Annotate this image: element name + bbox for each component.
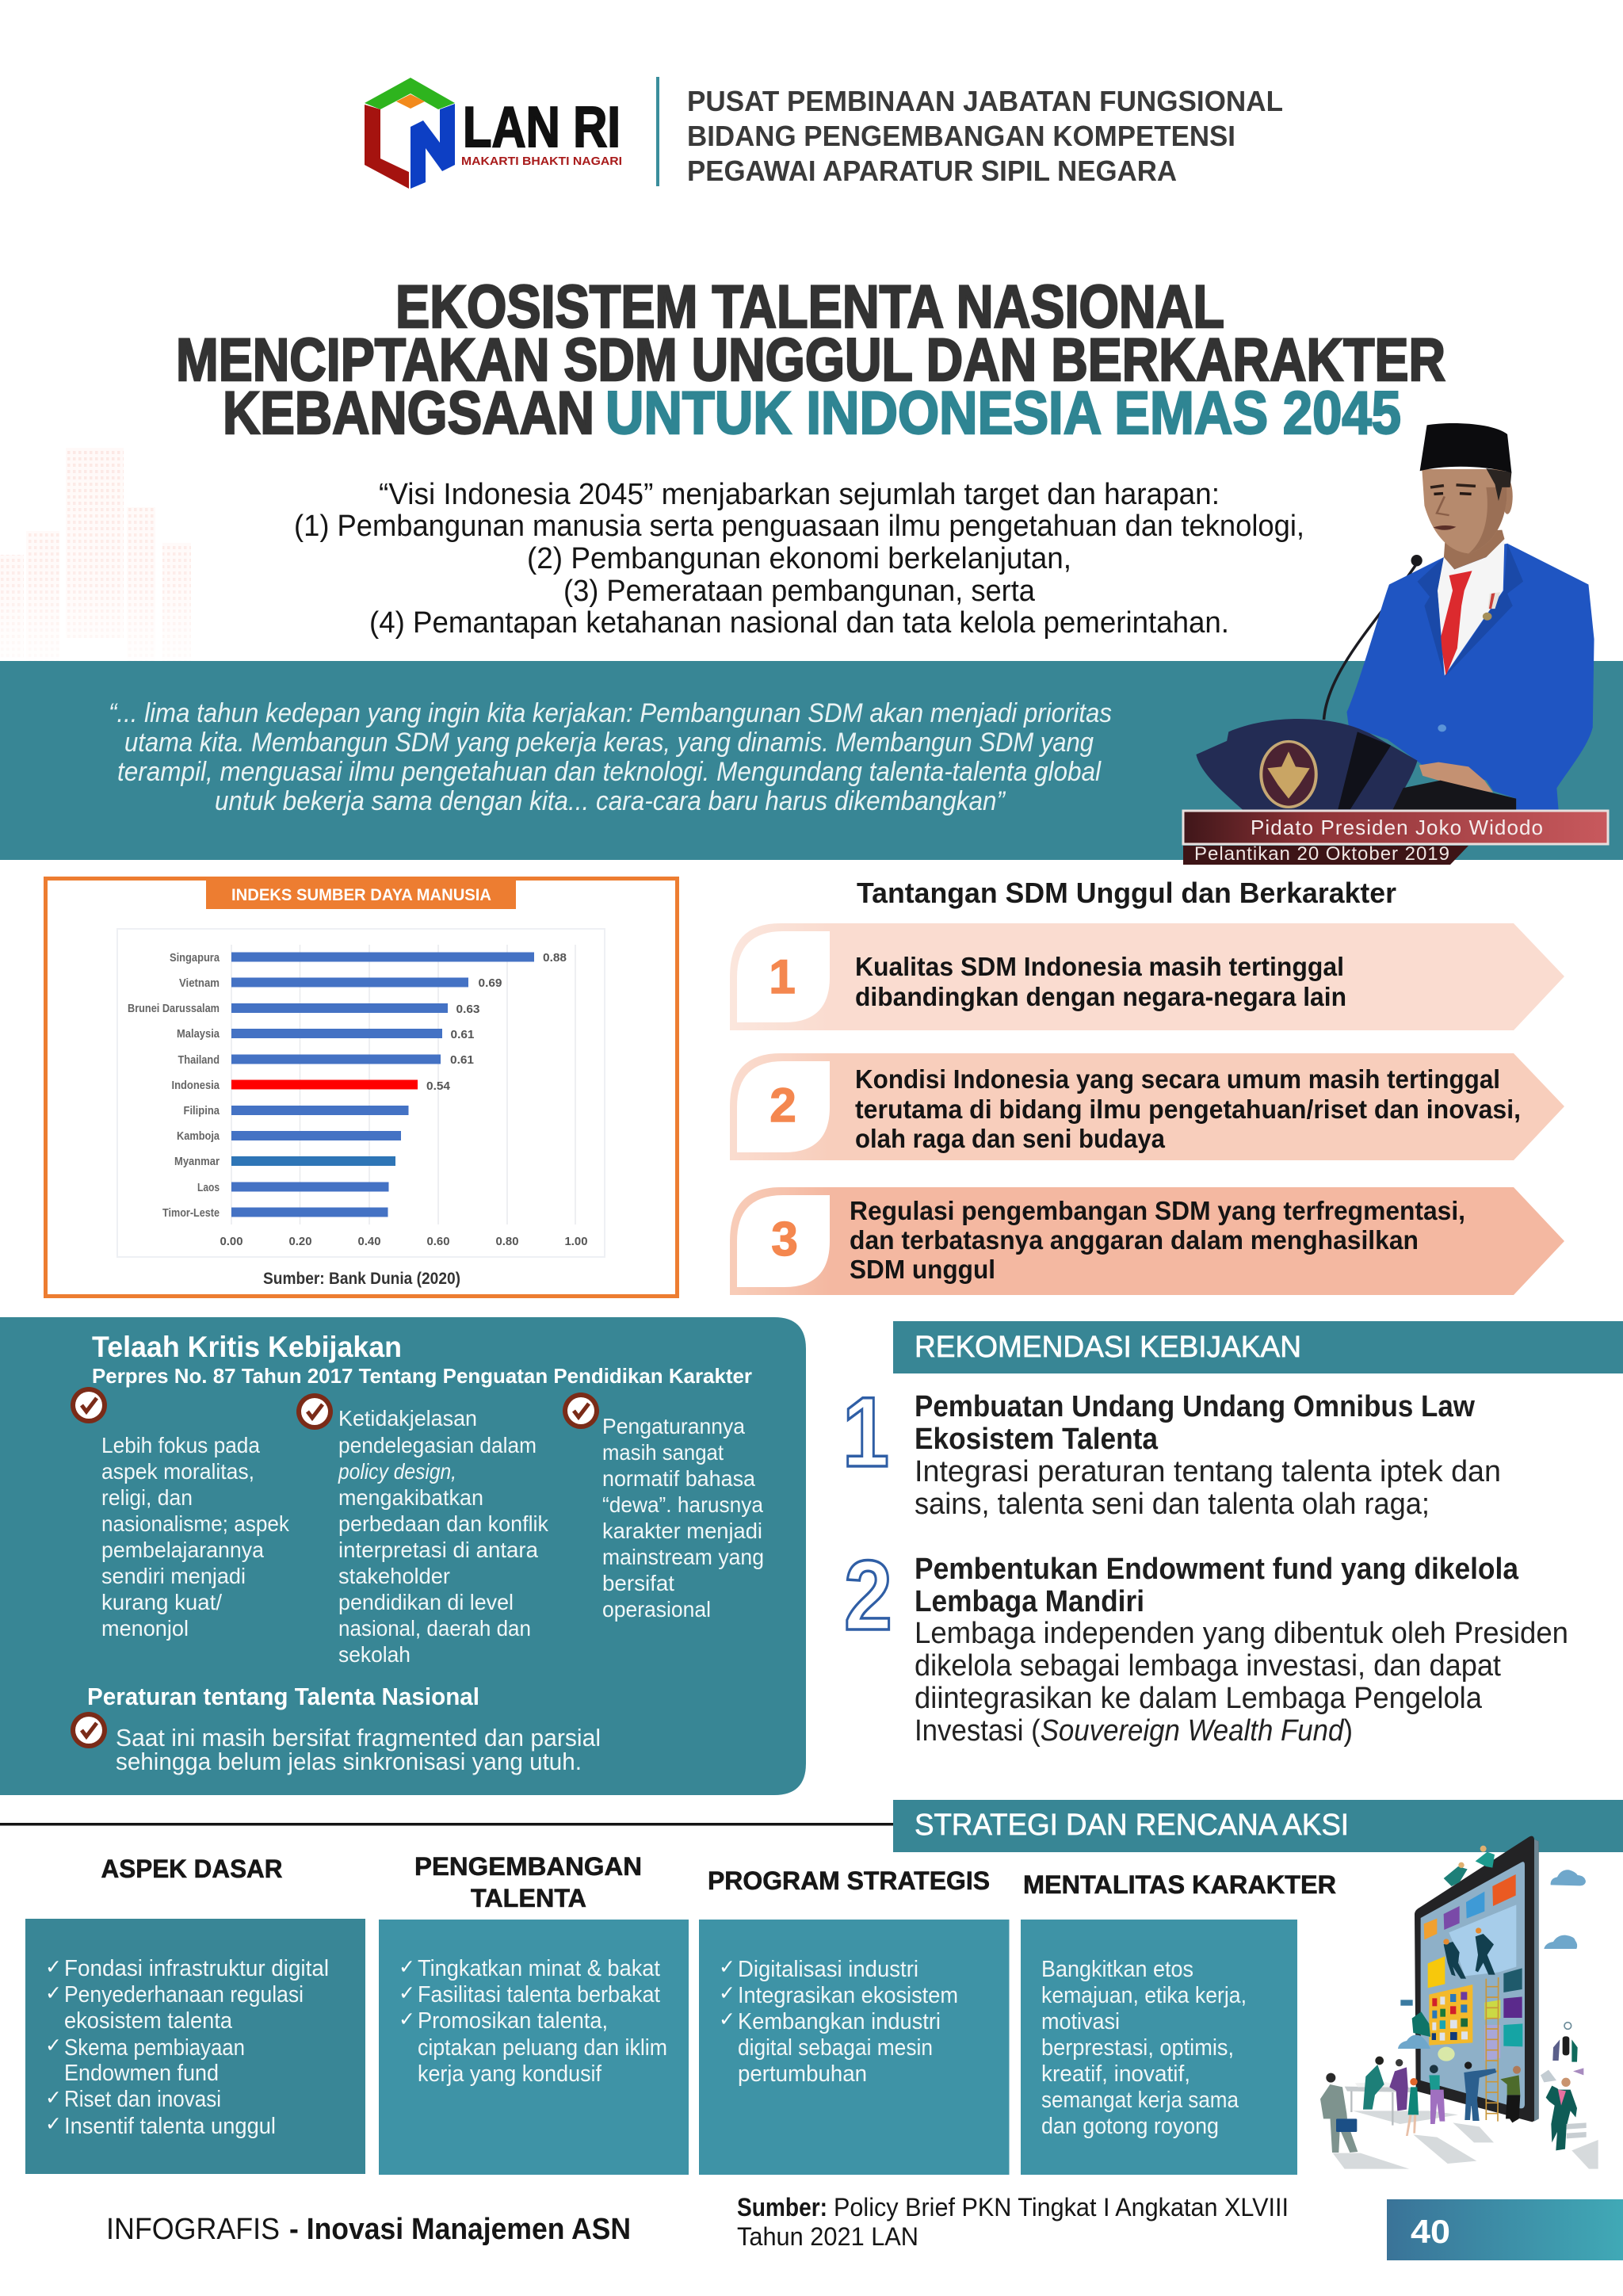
heading bar: Strategi dan Rencana Aksi — [893, 1800, 1623, 1852]
eyes — [1430, 485, 1476, 487]
recommendation 2 text: Lembaga independen yang dibentuk oleh Presiden — [915, 1617, 1568, 1650]
woman in purple trousers — [1429, 2065, 1445, 2124]
panel: Mentalitas Karakter: semangat kerja sama — [1041, 2088, 1239, 2113]
caption date bar — [1183, 846, 1468, 865]
value labels: 0.61 — [450, 1028, 474, 1041]
chart heading: INDEKS SUMBER DAYA MANUSIA — [231, 886, 491, 904]
Peraturan body text: Saat ini masih bersifat fragmented dan parsial — [116, 1724, 601, 1752]
face shadow — [1468, 487, 1507, 553]
teal man at table — [1363, 2057, 1384, 2110]
arrow 2: olah raga dan seni budaya — [855, 1124, 1166, 1153]
panel: Mentalitas Karakter: kreatif, inovatif, — [1041, 2061, 1190, 2087]
country labels: Timor-Leste — [162, 1206, 220, 1220]
panel: Aspek Dasar: ✓ — [45, 1981, 62, 2004]
text column 3: karakter menjadi — [602, 1519, 762, 1543]
axis labels: 0.20 — [288, 1235, 312, 1248]
text column 1 — [101, 1433, 290, 1641]
text column 3: operasional — [602, 1597, 711, 1622]
panel: Program Strategis: ✓ — [719, 1955, 735, 1978]
recommendation 1 text: Pembuatan Undang Undang Omnibus Law — [915, 1390, 1475, 1423]
country labels — [128, 951, 220, 1220]
country labels: Malaysia — [177, 1027, 220, 1041]
caption bar — [1183, 811, 1608, 844]
table — [1345, 2082, 1413, 2126]
text column 2: sekolah — [338, 1642, 411, 1667]
text column 3: mainstream yang — [602, 1545, 764, 1569]
text column 1: kurang kuat/ — [101, 1590, 222, 1614]
panel: Mentalitas Karakter: kemajuan, etika kerja, — [1041, 1983, 1247, 2008]
presidential quote: utama kita. Membangun SDM yang pekerja keras, yang dinamis. Membangun SDM yang — [124, 728, 1094, 758]
speech bubble — [1438, 2047, 1455, 2061]
recommendation 1 — [842, 1377, 1501, 1521]
panel: Aspek Dasar: Endowmen fund — [64, 2061, 219, 2086]
ground people — [1320, 2000, 1587, 2153]
logo: LAN RI — [365, 78, 622, 189]
panel: Program Strategis: digital sebagai mesin — [738, 2035, 933, 2061]
panel: Pengembangan Talenta: ✓ — [399, 2008, 415, 2030]
arrow 1: dibandingkan dengan negara-negara lain — [855, 982, 1346, 1011]
caption name: Pidato Presiden Joko Widodo — [1251, 816, 1543, 839]
footer source: Sumber: — [737, 2193, 827, 2222]
value labels: 0.88 — [543, 951, 567, 965]
footer source: Tahun 2021 LAN — [737, 2222, 918, 2251]
intro text: Visi Indonesia 2045: (3) Pemerataan pembangunan, serta — [563, 575, 1036, 608]
heading: Tantangan: Tantangan SDM Unggul dan Berkarakter — [857, 877, 1396, 909]
arrow 2: terutama di bidang ilmu pengetahuan/riset dan inovasi, — [855, 1095, 1521, 1124]
panel: Mentalitas Karakter — [1021, 1920, 1297, 2175]
logo tagline: MAKARTI BHAKTI NAGARI — [461, 155, 622, 168]
icon: number 1: 1 — [842, 1377, 889, 1488]
panel: HDI bar chart — [46, 878, 677, 1297]
microphone — [1324, 563, 1418, 720]
text column 3: “dewa”. harusnya — [602, 1492, 763, 1517]
recommendation 2 text: dikelola sebagai lembaga investasi, dan dapat — [915, 1649, 1501, 1683]
header institution text: BIDANG PENGEMBANGAN KOMPETENSI — [687, 120, 1235, 152]
panel: Mentalitas Karakter: berprestasi, optimis, — [1041, 2035, 1234, 2061]
nose — [1437, 496, 1449, 515]
panel: Program Strategis: pertumbuhan — [738, 2061, 867, 2087]
arrow 3: dan terbatasnya anggaran dalam menghasilkan — [850, 1225, 1419, 1255]
president photo illustration — [1183, 423, 1608, 865]
text column 2: nasional, daerah dan — [338, 1616, 531, 1641]
country labels: Brunei Darussalam — [128, 1002, 220, 1015]
icon: check 1 — [71, 1387, 107, 1423]
app icons — [1424, 1874, 1516, 1939]
footer source — [737, 2193, 1289, 2251]
page number — [1387, 2199, 1623, 2260]
arrow 2: 2 — [769, 1079, 796, 1132]
text column 2: stakeholder — [338, 1564, 450, 1588]
icon: check 4 — [71, 1712, 107, 1748]
arrow 3 — [730, 1187, 1564, 1295]
mouth — [1434, 525, 1456, 530]
text column 1: nasionalisme; aspek — [101, 1511, 290, 1536]
shadows — [1333, 2111, 1598, 2169]
Peraturan body text: sehingga belum jelas sinkronisasi yang utuh. — [116, 1748, 582, 1775]
steps — [1567, 2122, 1587, 2138]
chart heading — [206, 881, 516, 909]
panel: Pengembangan Talenta: ✓ — [399, 1955, 415, 1978]
presidential quote — [109, 698, 1112, 816]
arrow 2 — [730, 1053, 1564, 1160]
recommendation 2 text: diintegrasikan ke dalam Lembaga Pengelola — [915, 1682, 1483, 1715]
Peraturan body text — [116, 1724, 601, 1775]
small figures right — [1552, 2023, 1583, 2075]
illustration: people building a giant tablet — [1320, 1836, 1598, 2169]
clouds — [1398, 1870, 1586, 2049]
text column 2: policy design, — [338, 1459, 456, 1484]
panel: Mentalitas Karakter: dan gotong royong — [1041, 2114, 1219, 2139]
climbers — [1412, 1846, 1495, 2037]
axis labels — [220, 1235, 588, 1248]
arrow 1: Kualitas SDM Indonesia masih tertinggal — [855, 952, 1344, 981]
presidential quote: “... lima tahun kedepan yang ingin kita kerjakan: Pembangunan SDM akan menjadi prioritas — [109, 698, 1112, 728]
text column 2: pendelegasian dalam — [338, 1433, 537, 1457]
recommendation 2 text: Lembaga Mandiri — [915, 1585, 1144, 1618]
country labels: Indonesia — [171, 1079, 220, 1092]
chart frame — [46, 878, 677, 1297]
icon: check 3 — [563, 1392, 599, 1429]
column heading: Aspek Dasar: ASPEK DASAR — [101, 1855, 282, 1883]
recommendation 2 text — [915, 1553, 1568, 1748]
country labels: Myanmar — [174, 1155, 220, 1168]
column heading: Pengembangan Talenta: PENGEMBANGAN — [414, 1852, 642, 1881]
arrow 3: Regulasi pengembangan SDM yang terfregmentasi, — [850, 1196, 1465, 1225]
footer label: - Inovasi Manajemen ASN — [289, 2213, 631, 2246]
column heading: Pengembangan Talenta: TALENTA — [471, 1884, 586, 1912]
text column 2: Ketidakjelasan — [338, 1406, 477, 1431]
country labels: Thailand — [178, 1053, 220, 1067]
icon: number 2: 2 — [844, 1541, 892, 1651]
panel: Aspek Dasar: ✓ — [45, 2112, 62, 2135]
subheading: Peraturan: Peraturan tentang Talenta Nasional — [87, 1683, 479, 1710]
footer label — [106, 2213, 631, 2246]
text column 1: sendiri menjadi — [101, 1564, 246, 1588]
country labels: Laos — [197, 1181, 220, 1194]
man in green shirt — [1500, 2066, 1521, 2122]
panel: Aspek Dasar: ekosistem talenta — [64, 2008, 233, 2034]
recommendation 1 text: sains, talenta seni dan talenta olah raga; — [915, 1488, 1430, 1521]
country labels: Vietnam — [179, 976, 220, 990]
text column 3: masih sangat — [602, 1440, 724, 1465]
intro text: Visi Indonesia 2045: (4) Pemantapan ketahanan nasional dan tata kelola pemerintahan. — [369, 606, 1229, 640]
text column 1: menonjol — [101, 1616, 189, 1641]
face — [1422, 469, 1507, 553]
recommendation 2 text: Investasi (Souvereign Wealth Fund) — [915, 1714, 1353, 1748]
value labels — [426, 951, 567, 1093]
panel: Aspek Dasar: Insentif talenta unggul — [64, 2114, 276, 2139]
panel: Pengembangan Talenta: Tingkatkan minat & bakat — [418, 1956, 660, 1981]
recommendation 2 text: Pembentukan Endowment fund yang dikelola — [915, 1553, 1519, 1586]
panel: Mentalitas Karakter: motivasi — [1041, 2009, 1120, 2034]
book — [1400, 2000, 1413, 2006]
caption date: Pelantikan 20 Oktober 2019 — [1194, 843, 1449, 865]
panel: Aspek Dasar: ✓ — [45, 2034, 62, 2057]
presidential quote: terampil, menguasai ilmu pengetahuan dan teknologi. Mengundang talenta-talenta global — [117, 757, 1102, 787]
title: EKOSISTEM TALENTA NASIONAL — [395, 273, 1224, 341]
lectern — [1392, 781, 1516, 810]
arrow 3: SDM unggul — [850, 1255, 995, 1284]
panel: Pengembangan Talenta: ciptakan peluang dan iklim — [418, 2035, 667, 2061]
intro text: Visi Indonesia 2045: “Visi Indonesia 2045” menjabarkan sejumlah target dan harapan: — [379, 478, 1220, 511]
text column 3: Pengaturannya — [602, 1414, 745, 1438]
value labels: 0.61 — [450, 1053, 474, 1067]
panel: Pengembangan Talenta — [379, 1920, 689, 2175]
panel: Pengembangan Talenta: ✓ — [399, 1981, 415, 2004]
hair — [1486, 468, 1511, 501]
ear — [1502, 479, 1513, 514]
panel heading: Telaah Kritis Kebijakan — [92, 1331, 402, 1363]
header institution text — [687, 85, 1283, 187]
man with megaphone — [1541, 2070, 1577, 2150]
panel: Aspek Dasar: Fondasi infrastruktur digital — [64, 1956, 329, 1981]
panel: Aspek Dasar: Penyederhanaan regulasi — [64, 1982, 304, 2008]
heading bar: Strategi dan Rencana Aksi: STRATEGI DAN RENCANA AKSI — [915, 1809, 1349, 1842]
teal quote band — [0, 661, 1623, 860]
panels on screen — [1428, 1956, 1522, 2061]
heading bar: Rekomendasi Kebijakan — [893, 1321, 1623, 1373]
suit — [1346, 544, 1594, 810]
intro text: Visi Indonesia 2045 — [294, 478, 1304, 640]
value labels: 0.69 — [479, 976, 502, 990]
man in blue suit — [1464, 2061, 1496, 2121]
footer source: Policy Brief PKN Tingkat I Angkatan XLVIII — [834, 2193, 1289, 2222]
presidential quote: untuk bekerja sama dengan kita... cara-cara baru harus dikembangkan” — [215, 786, 1006, 816]
column heading: Pengembangan Talenta — [414, 1852, 642, 1912]
header institution text: PEGAWAI APARATUR SIPIL NEGARA — [687, 155, 1177, 187]
panel: Aspek Dasar: Skema pembiayaan — [64, 2035, 245, 2061]
footer label: INFOGRAFIS — [106, 2213, 280, 2246]
emblem — [1261, 742, 1316, 807]
country labels: Filipina — [184, 1104, 220, 1117]
text column 1: aspek moralitas, — [101, 1459, 254, 1484]
panel: Pengembangan Talenta: kerja yang kondusif — [418, 2061, 602, 2087]
value labels: 0.54 — [426, 1079, 451, 1093]
axis labels: 0.00 — [220, 1235, 242, 1248]
text column 2: perbedaan dan konflik — [338, 1511, 549, 1536]
axis labels: 0.80 — [496, 1235, 518, 1248]
intro text: Visi Indonesia 2045: (1) Pembangunan manusia serta penguasaan ilmu pengetahuan dan teknologi, — [294, 510, 1304, 543]
header institution text: PUSAT PEMBINAAN JABATAN FUNGSIONAL — [687, 85, 1283, 117]
hand — [1419, 762, 1493, 793]
panel: Program Strategis: ✓ — [719, 2008, 735, 2030]
panel: Aspek Dasar: ✓ — [45, 1955, 62, 1978]
decorative city silhouette — [0, 444, 198, 690]
intro text: Visi Indonesia 2045: (2) Pembangunan ekonomi berkelanjutan, — [527, 542, 1071, 575]
arrow 1 — [730, 923, 1564, 1030]
text column 2: interpretasi di antara — [338, 1538, 538, 1562]
panel: Aspek Dasar: ✓ — [45, 2086, 62, 2109]
medal — [1488, 592, 1500, 609]
text column 2 — [338, 1406, 549, 1667]
axis labels: 1.00 — [564, 1235, 588, 1248]
text column 3: normatif bahasa — [602, 1466, 755, 1491]
panel: Mentalitas Karakter: Bangkitkan etos — [1041, 1957, 1193, 1982]
panel: Pengembangan Talenta: Promosikan talenta, — [418, 2008, 608, 2034]
neck — [1444, 530, 1504, 569]
recommendation 1 text — [915, 1390, 1501, 1521]
plot area — [117, 929, 605, 1257]
text column 2: mengakibatkan — [338, 1485, 483, 1510]
shirt — [1438, 537, 1504, 675]
column heading: Program Strategis: PROGRAM STRATEGIS — [708, 1866, 990, 1895]
text column 3 — [602, 1414, 764, 1622]
lapels — [1445, 544, 1523, 677]
country labels: Kamboja — [177, 1129, 220, 1143]
title: UNTUK INDONESIA EMAS 2045 — [605, 380, 1401, 447]
divider line — [0, 1823, 894, 1826]
text column 2: pendidikan di level — [338, 1590, 514, 1614]
panel subheading: Perpres No. 87 Tahun 2017 Tentang Penguatan Pendidikan Karakter — [92, 1364, 752, 1388]
arrow 1: 1 — [769, 950, 796, 1003]
shelf grid — [1429, 1985, 1472, 2046]
logo wordmark: LAN RI — [463, 96, 621, 159]
sky window — [1449, 1904, 1516, 1976]
panel: Aspek Dasar: Riset dan inovasi — [64, 2087, 221, 2112]
arrow 3: 3 — [771, 1213, 798, 1266]
text column 3: bersifat — [602, 1571, 674, 1595]
title — [176, 273, 1445, 447]
podium — [1196, 719, 1418, 810]
tablet screen — [1421, 1862, 1525, 2108]
bars — [231, 953, 534, 1217]
woman in teal dress — [1406, 2078, 1419, 2136]
panel: Program Strategis — [699, 1920, 1010, 2175]
peci cap — [1420, 423, 1511, 473]
title: KEBANGSAAN — [223, 380, 594, 447]
country labels: Singapura — [170, 951, 220, 965]
logo mark: house hexagon — [365, 78, 455, 189]
tie — [1440, 571, 1472, 675]
page number: 40 — [1411, 2213, 1450, 2250]
panel: Program Strategis: ✓ — [719, 1981, 735, 2004]
panel: Pengembangan Talenta: Fasilitasi talenta berbakat — [418, 1982, 660, 2008]
ladder — [1486, 1977, 1499, 2122]
recommendation 1 text: Ekosistem Talenta — [915, 1423, 1159, 1456]
panel: Telaah Kritis Kebijakan — [0, 1317, 806, 1795]
text column 1: religi, dan — [101, 1485, 193, 1510]
text column 1: pembelajarannya — [101, 1538, 264, 1562]
axis labels: 0.40 — [358, 1235, 380, 1248]
chart source: Sumber: Bank Dunia (2020) — [263, 1270, 460, 1288]
panel: Program Strategis: Integrasikan ekosistem — [738, 1983, 958, 2008]
purple man at table — [1389, 2059, 1408, 2111]
panel: Program Strategis: Kembangkan industri — [738, 2009, 941, 2034]
heading bar: Rekomendasi Kebijakan: REKOMENDASI KEBIJAKAN — [915, 1331, 1301, 1364]
text column 1: Lebih fokus pada — [101, 1433, 260, 1457]
value labels: 0.63 — [456, 1003, 480, 1016]
panel: Aspek Dasar — [25, 1919, 365, 2174]
recommendation 1 text: Integrasi peraturan tentang talenta iptek dan — [915, 1455, 1501, 1488]
panel: Program Strategis: Digitalisasi industri — [738, 1957, 918, 1982]
recommendation 2 — [844, 1541, 1568, 1748]
icon: check 2 — [296, 1393, 333, 1430]
column heading: Mentalitas Karakter: MENTALITAS KARAKTER — [1023, 1870, 1336, 1899]
axis labels: 0.60 — [426, 1235, 450, 1248]
header divider — [656, 77, 659, 186]
arrow 2: Kondisi Indonesia yang secara umum masih tertinggal — [855, 1064, 1500, 1094]
tablet body — [1415, 1836, 1539, 2122]
man with briefcase — [1320, 2073, 1358, 2153]
